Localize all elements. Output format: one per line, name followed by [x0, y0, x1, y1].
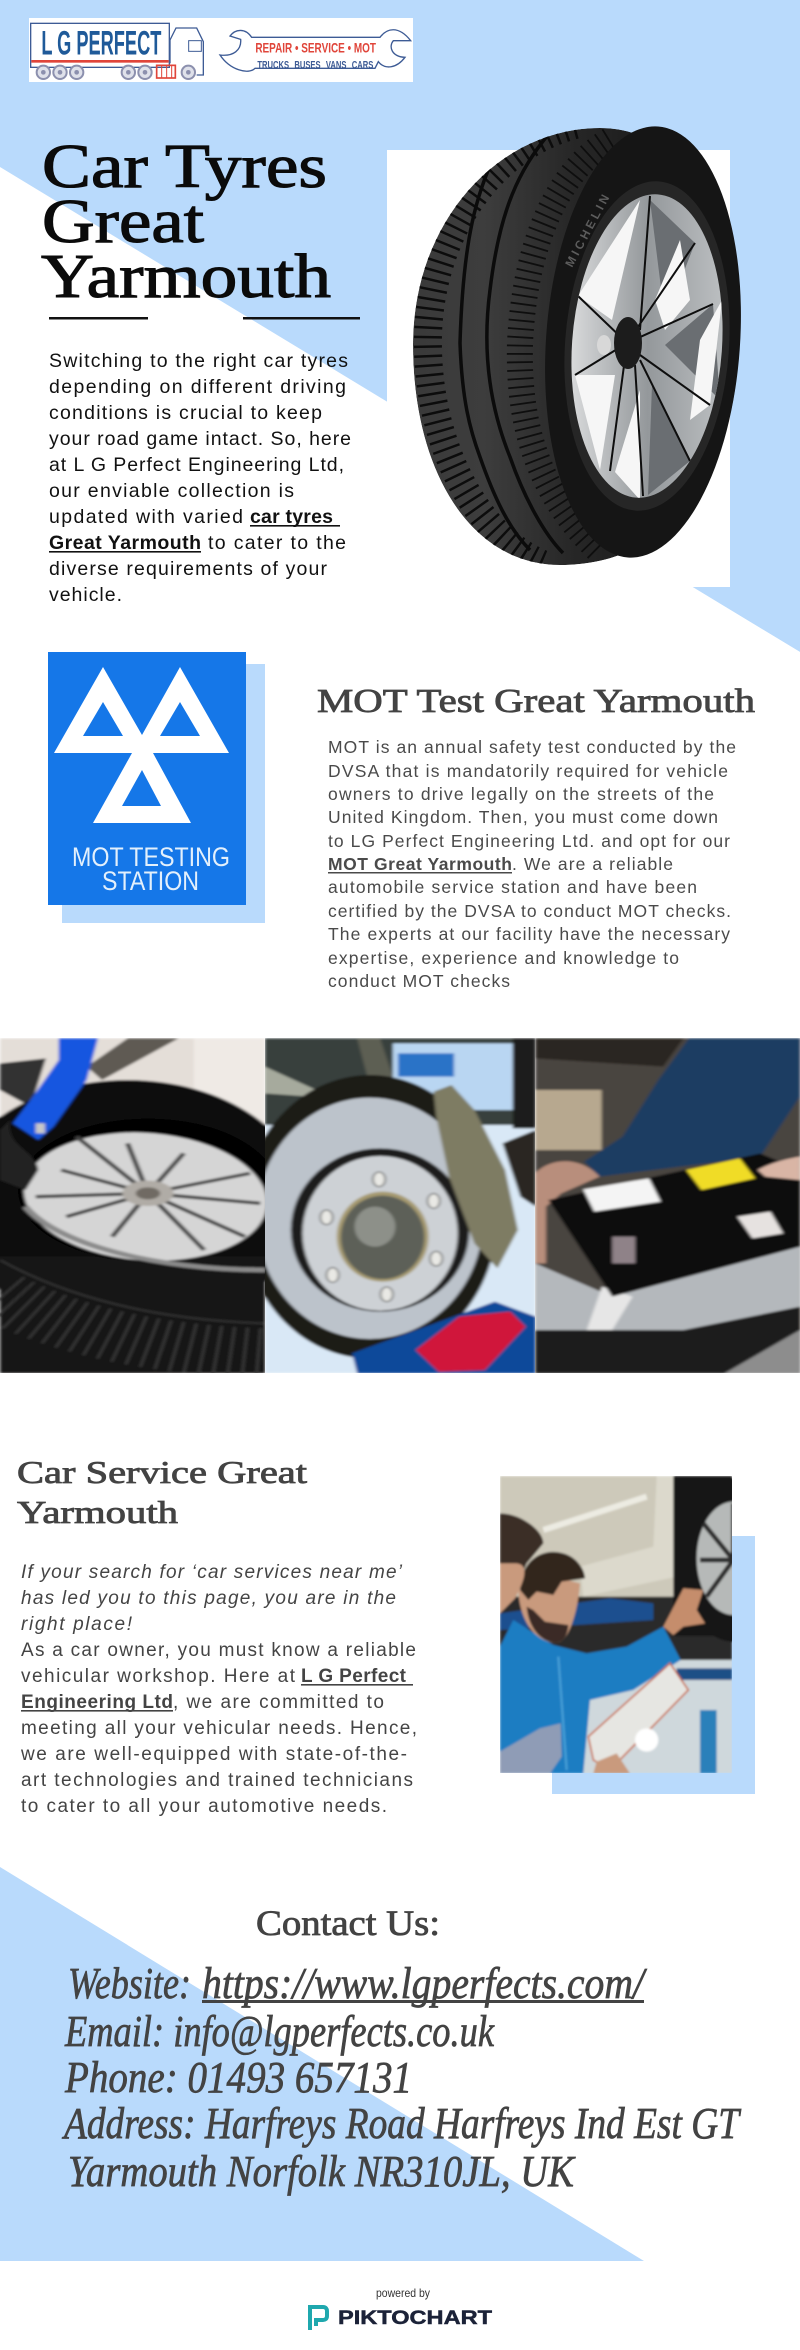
MOT paragraph: automobile service station and have been — [328, 877, 697, 897]
icon: truck — [31, 23, 203, 79]
title: Great — [42, 188, 204, 256]
website: Website: — [68, 1959, 191, 2008]
badge label: MOT TESTING — [72, 842, 230, 872]
car service paragraph — [20, 1562, 417, 1817]
badge label: STATION — [102, 866, 199, 896]
MOT paragraph: DVSA that is mandatorily required for vehicle — [328, 761, 728, 781]
car service paragraph: L G Perfect — [301, 1666, 407, 1687]
MOT paragraph: . We are a reliable — [512, 854, 673, 874]
photo: mechanic with clipboard — [500, 1476, 732, 1773]
MOT paragraph: MOT Great Yarmouth — [328, 854, 512, 874]
car service paragraph: , we are committed to — [173, 1692, 384, 1713]
car service paragraph: to cater to all your automotive needs. — [21, 1796, 387, 1817]
icon: wrench — [220, 30, 411, 71]
website: https://www.lgperfects.com/ — [202, 1959, 647, 2008]
car service paragraph: Engineering Ltd — [21, 1692, 173, 1713]
footer: powered by Piktochart — [310, 2286, 492, 2330]
car service paragraph: As a car owner, you must know a reliable — [21, 1640, 416, 1661]
intro paragraph: updated with varied — [49, 506, 243, 528]
heading: contact us: Contact Us: — [256, 1903, 440, 1943]
intro paragraph — [49, 350, 351, 606]
wheel rim — [571, 194, 723, 498]
phone: Phone: 01493 657131 — [64, 2053, 412, 2102]
intro paragraph: at L G Perfect Engineering Ltd, — [49, 454, 344, 476]
MOT paragraph — [328, 737, 736, 991]
wheel hub — [614, 317, 642, 369]
footer: powered by Piktochart: PIKTOCHART — [338, 2308, 492, 2329]
address — [61, 2099, 742, 2196]
logo name: L G PERFECT — [41, 24, 161, 62]
title — [41, 133, 331, 311]
badge label — [72, 842, 230, 896]
MOT paragraph: conduct MOT checks — [328, 971, 510, 991]
heading: MOT test: MOT Test Great Yarmouth — [317, 683, 755, 720]
car service paragraph: vehicular workshop. Here at — [21, 1666, 296, 1687]
heading: car service: Car Service Great — [17, 1454, 307, 1490]
heading: car service: Yarmouth — [17, 1494, 178, 1530]
background: bottom blue triangle — [0, 1867, 644, 2261]
photo: tyre being fitted — [0, 1038, 265, 1373]
car service paragraph: art technologies and trained technicians — [21, 1770, 413, 1791]
car service paragraph: If your search for ‘car services near me’ — [21, 1562, 403, 1583]
intro paragraph: Great Yarmouth — [49, 532, 201, 554]
title: Car Tyres — [42, 133, 327, 201]
logo tagline: vehicles: TRUCKS BUSES VANS CARS — [257, 60, 374, 72]
tyre sidewall brand: MICHELIN — [562, 192, 612, 269]
intro paragraph: vehicle. — [49, 584, 122, 606]
title underline rules — [49, 317, 360, 320]
car service paragraph: meeting all your vehicular needs. Hence, — [21, 1718, 417, 1739]
intro paragraph: Switching to the right car tyres — [49, 350, 348, 372]
heading: car service — [17, 1454, 307, 1530]
white panel behind tyre — [387, 150, 730, 587]
logo banner — [29, 18, 413, 82]
title: Yarmouth — [41, 243, 331, 311]
car service paragraph: right place! — [21, 1614, 133, 1635]
footer: powered by Piktochart: powered by — [376, 2286, 430, 2300]
MOT badge — [48, 652, 246, 905]
car service paragraph: we are well-equipped with state-of-the- — [20, 1744, 407, 1765]
email: Email: info@lgperfects.co.uk — [64, 2007, 495, 2056]
contact details — [61, 1959, 742, 2196]
intro paragraph: conditions is crucial to keep — [49, 402, 322, 424]
mechanic photo shadow — [552, 1536, 755, 1794]
MOT paragraph: The experts at our facility have the necessary — [328, 924, 730, 944]
intro paragraph: your road game intact. So, here — [49, 428, 351, 450]
MOT paragraph: MOT is an annual safety test conducted by the — [328, 737, 736, 757]
car service paragraph: has led you to this page, you are in the — [21, 1588, 396, 1609]
MOT paragraph: owners to drive legally on the streets of the — [328, 784, 714, 804]
photo: brake disc — [242, 1038, 536, 1373]
icon: Piktochart mark — [310, 2307, 327, 2330]
tyre image — [413, 120, 755, 565]
white corner below diagonal — [692, 587, 800, 652]
intro paragraph: to cater to the — [208, 532, 346, 554]
intro paragraph: depending on different driving — [49, 376, 346, 398]
intro paragraph: diverse requirements of your — [49, 558, 328, 580]
MOT paragraph: to LG Perfect Engineering Ltd. and opt for our — [328, 831, 730, 851]
logo tagline: services: REPAIR • SERVICE • MOT — [255, 40, 376, 56]
background: top blue panel — [0, 0, 800, 652]
MOT paragraph: certified by the DVSA to conduct MOT checks. — [328, 901, 731, 921]
MOT paragraph: expertise, experience and knowledge to — [328, 948, 679, 968]
intro paragraph: car tyres — [250, 506, 333, 528]
MOT badge shadow — [62, 664, 265, 923]
address: Yarmouth Norfolk NR310JL, UK — [68, 2147, 576, 2196]
icon: MOT triangles — [54, 667, 229, 823]
photo: car battery — [535, 1038, 800, 1373]
MOT paragraph: United Kingdom. Then, you must come down — [328, 807, 718, 827]
intro paragraph: our enviable collection is — [49, 480, 294, 502]
